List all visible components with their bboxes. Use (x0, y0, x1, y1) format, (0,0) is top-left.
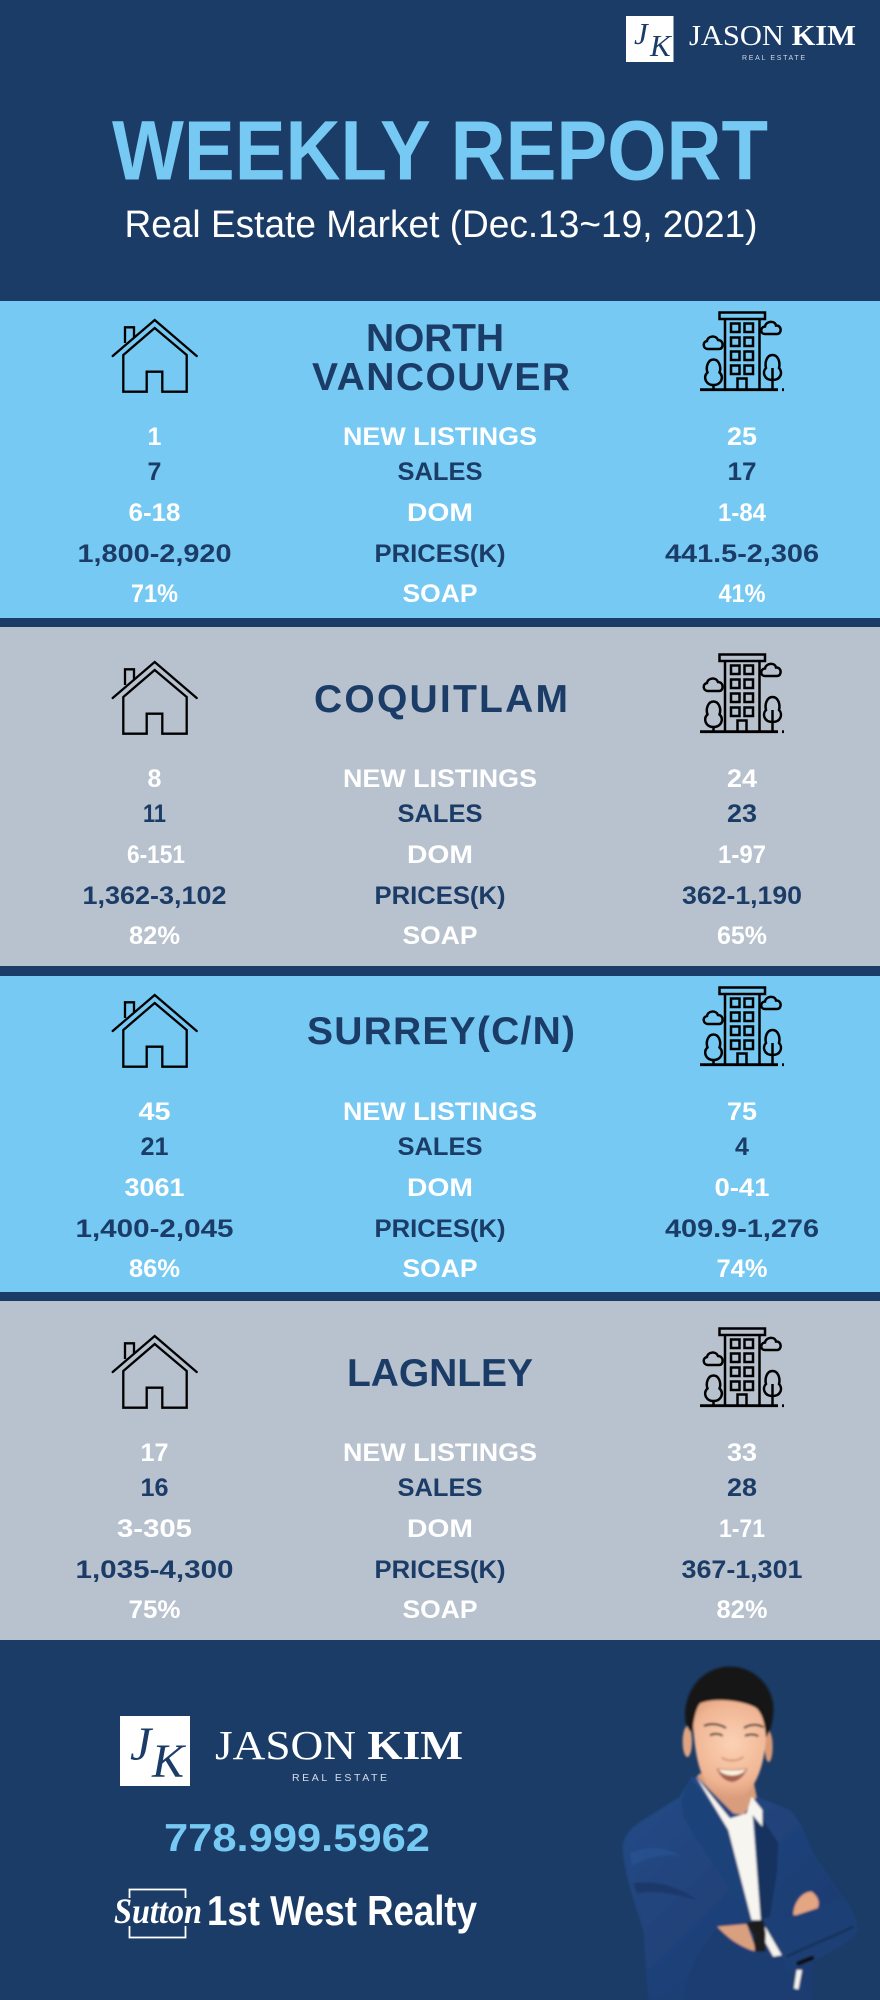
row labels (343, 765, 537, 950)
house values (76, 1439, 234, 1624)
condo values: 441.5-2,306 (665, 540, 819, 568)
shirt cuff (764, 1927, 783, 1957)
house values: 1 (148, 423, 162, 451)
row labels: PRICES(K) (374, 540, 506, 568)
title: WEEKLY REPORT (112, 104, 768, 198)
condo values: 362-1,190 (682, 882, 802, 910)
icon: house (113, 662, 197, 734)
condo values (682, 765, 802, 950)
condo values: 75 (727, 1098, 757, 1126)
logo mark (626, 16, 674, 63)
brokerage logo (114, 1887, 478, 1938)
condo values: 409.9-1,276 (665, 1215, 819, 1243)
row labels: SOAP (402, 580, 478, 608)
icon: apartment building (700, 988, 784, 1065)
house values: 21 (140, 1133, 169, 1161)
house values: 75% (128, 1596, 180, 1624)
row labels: SOAP (402, 922, 478, 950)
eyes and brows (704, 1724, 763, 1728)
logo mark: J (130, 1718, 154, 1771)
row labels: DOM (407, 499, 473, 527)
row labels: SALES (398, 800, 482, 828)
house values (76, 1098, 234, 1283)
row labels (343, 423, 537, 608)
row labels: SALES (398, 1474, 482, 1502)
icon: apartment building (700, 312, 784, 390)
house values: 16 (140, 1474, 168, 1502)
heading: COQUITLAM (314, 678, 568, 721)
house values: 11 (143, 800, 166, 828)
house values: 82% (129, 922, 180, 950)
condo values: 0-41 (714, 1174, 770, 1202)
phone number: 778.999.5962 (164, 1817, 430, 1860)
icon: house (113, 1336, 197, 1408)
icon: apartment building (700, 654, 784, 732)
house values: 17 (140, 1439, 168, 1467)
neck (697, 1773, 757, 1815)
forearm skin (717, 1924, 757, 1952)
lapel right (753, 1817, 778, 1920)
condo values: 74% (716, 1255, 768, 1283)
condo values: 28 (727, 1474, 757, 1502)
condo values: 41% (718, 580, 766, 608)
condo values: 1-71 (719, 1515, 765, 1543)
house values: 8 (148, 765, 162, 793)
condo values (665, 423, 819, 608)
smile (717, 1768, 747, 1782)
row labels: DOM (407, 1515, 473, 1543)
panel: Surrey (0, 976, 880, 1292)
ears (683, 1726, 692, 1757)
condo values (665, 1098, 819, 1283)
condo values: 23 (727, 800, 757, 828)
lapel left (682, 1777, 752, 1920)
icon: house (113, 995, 197, 1067)
heading: VANCOUVER (312, 356, 570, 399)
row labels: SOAP (402, 1596, 478, 1624)
icon: house (113, 320, 197, 392)
row labels: NEW LISTINGS (343, 765, 537, 793)
logo mark: K (151, 1735, 187, 1788)
condo values: 65% (717, 922, 767, 950)
house values: 45 (138, 1098, 171, 1126)
condo values: 25 (727, 423, 757, 451)
row labels: PRICES(K) (374, 882, 506, 910)
house values: 1,035-4,300 (76, 1556, 234, 1584)
house values: 86% (129, 1255, 180, 1283)
house values (82, 765, 226, 950)
condo values: 4 (735, 1133, 749, 1161)
house values: 1,362-3,102 (82, 882, 226, 910)
icon: apartment building (700, 1328, 784, 1406)
logo mark: K (649, 28, 673, 63)
row labels: DOM (407, 841, 473, 869)
condo values: 1-97 (718, 841, 766, 869)
logo wordmark: JASON KIM (689, 21, 856, 52)
upper sleeve (763, 1898, 857, 1972)
sleeve buttons (799, 1958, 812, 1963)
panel: Langley (0, 1301, 880, 1640)
heading: NORTH (366, 317, 504, 360)
row labels: SOAP (402, 1255, 478, 1283)
row labels: NEW LISTINGS (343, 1439, 537, 1467)
subtitle: Real Estate Market (Dec.13~19, 2021) (124, 204, 758, 246)
row labels: PRICES(K) (374, 1556, 506, 1584)
lower sleeve (683, 1928, 813, 2000)
top logo (626, 16, 856, 63)
house values: 6-18 (128, 499, 181, 527)
row labels: SALES (398, 1133, 482, 1161)
row labels (343, 1098, 537, 1283)
condo values (682, 1439, 803, 1624)
condo values: 33 (727, 1439, 757, 1467)
portrait: agent in navy suit (623, 1667, 857, 2000)
Sutton wordmark: Sutton (114, 1891, 202, 1931)
face (693, 1690, 767, 1799)
heading: LAGNLEY (347, 1352, 533, 1395)
hand (793, 1892, 819, 1917)
house values: 3061 (124, 1174, 185, 1202)
logo mark: J (634, 16, 649, 51)
condo values: 1-84 (718, 499, 766, 527)
house values: 1,400-2,045 (76, 1215, 234, 1243)
hair (685, 1667, 773, 1737)
icon: Sutton box (130, 1890, 186, 1938)
brokerage name: 1st West Realty (207, 1887, 478, 1934)
house values: 7 (148, 458, 161, 486)
condo values: 82% (716, 1596, 768, 1624)
house values: 3-305 (117, 1515, 192, 1543)
condo values: 24 (727, 765, 757, 793)
jacket folds (630, 1848, 682, 1867)
row labels: NEW LISTINGS (343, 423, 537, 451)
heading: SURREY(C/N) (307, 1010, 575, 1053)
heading (312, 317, 570, 399)
row labels: NEW LISTINGS (343, 1098, 537, 1126)
logo tagline: REAL ESTATE (742, 55, 805, 62)
logo tagline: REAL ESTATE (292, 1772, 387, 1784)
condo values: 367-1,301 (682, 1556, 803, 1584)
watch (746, 1920, 766, 1952)
house values: 6-151 (127, 841, 185, 869)
row labels: PRICES(K) (374, 1215, 506, 1243)
row labels (343, 1439, 537, 1624)
logo wordmark: JASON KIM (215, 1722, 463, 1768)
panel: North Vancouver (0, 301, 880, 618)
house values: 1,800-2,920 (78, 540, 232, 568)
jacket (623, 1777, 857, 2000)
shirt (696, 1777, 762, 1920)
house values: 71% (131, 580, 178, 608)
footer logo (120, 1716, 463, 1788)
row labels: DOM (407, 1174, 473, 1202)
row labels: SALES (398, 458, 482, 486)
house values (78, 423, 232, 608)
panel: Coquitlam (0, 627, 880, 966)
logo mark (120, 1716, 190, 1788)
condo values: 17 (728, 458, 756, 486)
